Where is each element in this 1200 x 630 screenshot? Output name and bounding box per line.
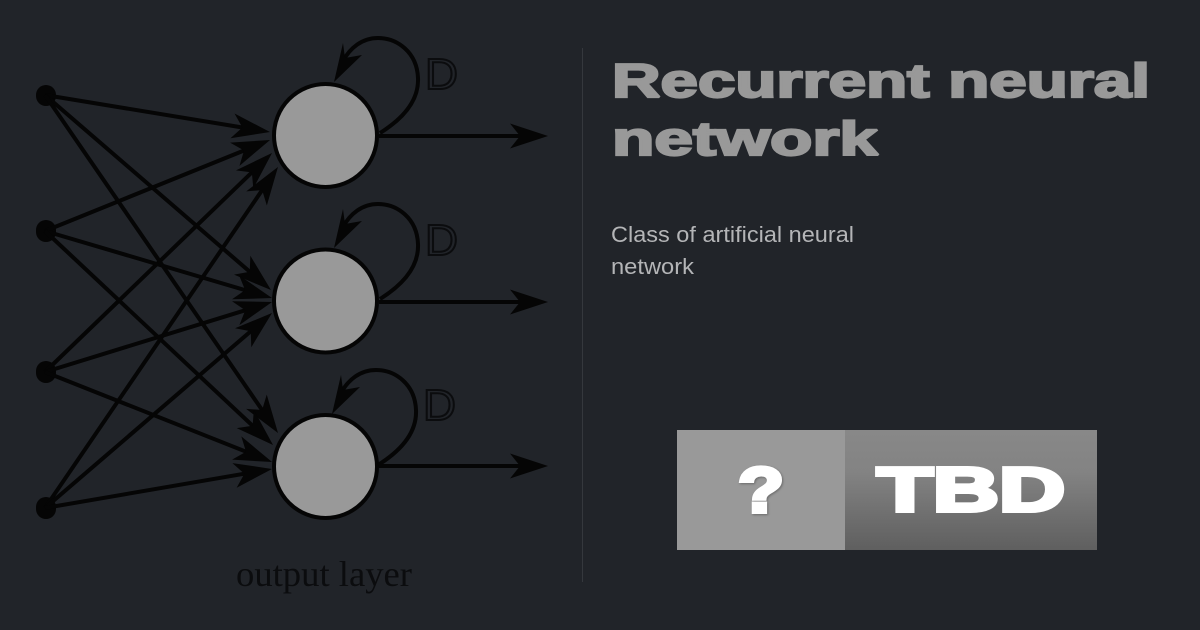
arrows into first output node [45, 95, 270, 508]
description: network [611, 254, 695, 279]
output node 1 [274, 38, 533, 187]
output arrow 1 [379, 134, 533, 138]
description: Class of artificial neural [611, 222, 854, 247]
output arrow 3 [379, 464, 533, 468]
input nodes [36, 85, 56, 519]
delay label D: D [425, 50, 458, 99]
output node 2 [274, 204, 533, 352]
delay label D: D [423, 381, 456, 430]
vertical divider [582, 48, 583, 582]
description [611, 222, 854, 279]
badge left segment [677, 430, 845, 550]
badge question mark: ? [738, 454, 784, 526]
caption: output layer: output layer [236, 554, 412, 594]
feedback loop 2 [334, 204, 418, 299]
title [612, 54, 1150, 165]
title: Recurrent neural [612, 54, 1150, 107]
arrows into third output node [45, 95, 270, 508]
badge: TBD [677, 430, 1097, 550]
feedback loop 3 [332, 370, 416, 465]
title: network [612, 112, 879, 165]
arrows into second output node [45, 95, 261, 508]
output node 3 [274, 370, 533, 518]
delay label D: D [425, 216, 458, 265]
diagram: recurrent network [36, 38, 533, 594]
output arrow 2 [379, 300, 533, 304]
feedback loop 1 [334, 38, 418, 133]
badge value: TBD [877, 456, 1065, 525]
badge right segment [845, 430, 1097, 550]
